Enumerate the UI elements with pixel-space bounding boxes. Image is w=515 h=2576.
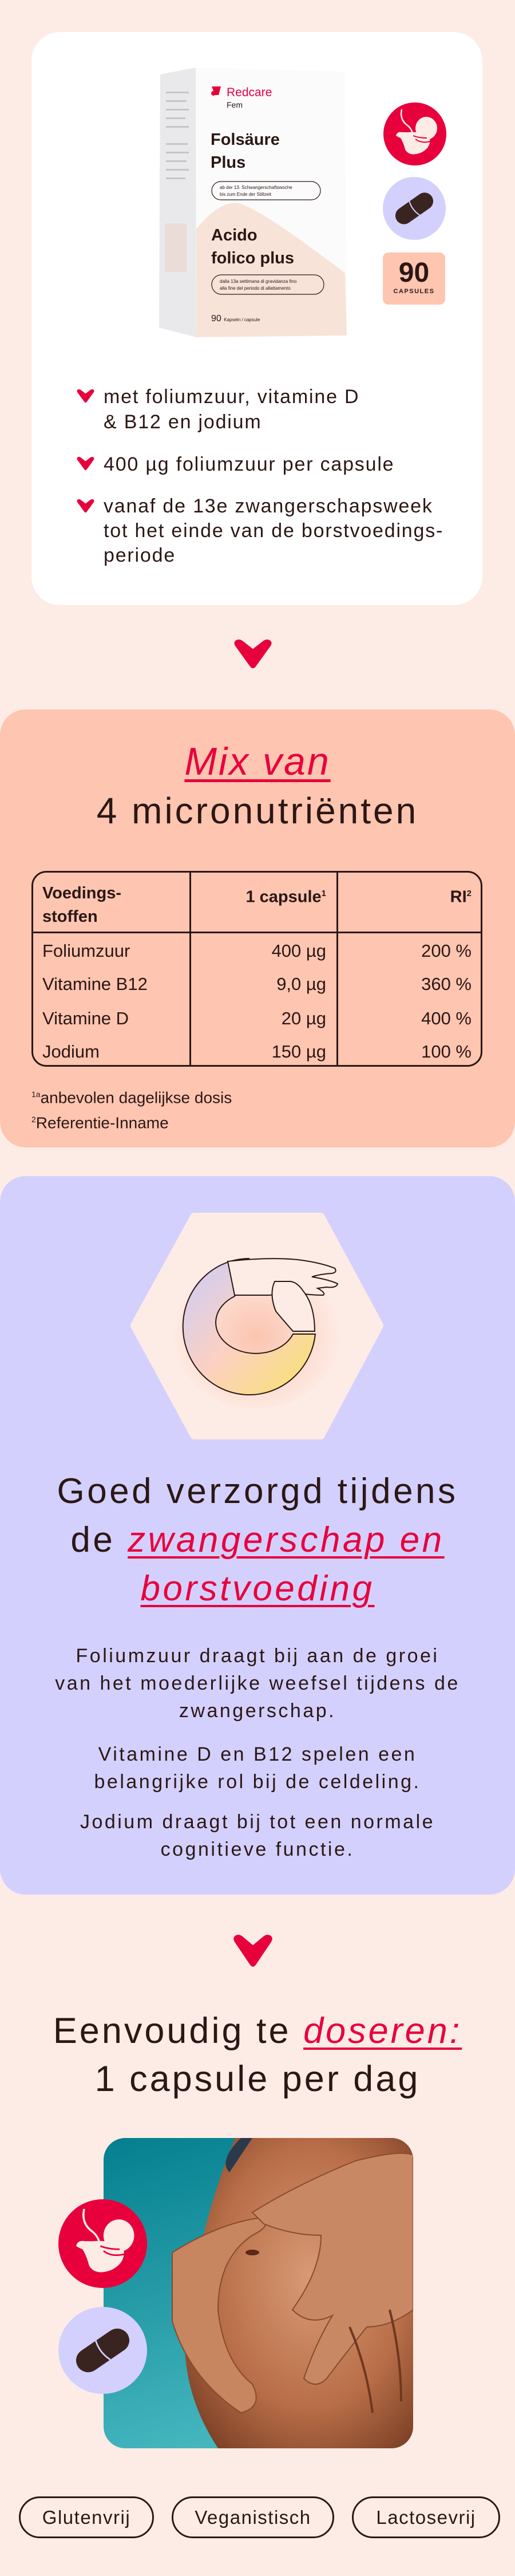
table: RI2 xyxy=(450,888,472,906)
table xyxy=(31,871,482,1067)
pill: veganistisch: Veganistisch xyxy=(195,2507,311,2527)
text: vitamins xyxy=(94,1743,421,1793)
panel: pregnancy care xyxy=(0,1176,515,1895)
heading: dosage: 1 capsule per dag xyxy=(95,2059,420,2099)
bullet 3: vanaf de 13e zwangerschapsweek xyxy=(104,495,433,517)
heading: pregnancy and breastfeeding: borstvoeding xyxy=(140,1569,375,1608)
text: iodine xyxy=(80,1811,435,1860)
text: folic acid: zwangerschap. xyxy=(179,1700,336,1722)
table: 400 µg xyxy=(272,941,326,961)
product box: Folsäure xyxy=(211,131,280,149)
icon: capsule (photo) xyxy=(58,2307,147,2394)
heading: dosage xyxy=(53,2011,462,2099)
text: benefits xyxy=(55,1645,460,1860)
text: iodine: Jodium draagt bij tot een normale xyxy=(80,1811,435,1833)
heading: dosage: Eenvoudig te doseren: xyxy=(53,2011,462,2051)
table: Jodium xyxy=(42,1042,100,1062)
heading: pregnancy and breastfeeding: Goed verzorgd tijdens xyxy=(57,1472,458,1511)
table: 360 % xyxy=(421,974,472,994)
product box: alla fine del periodo di allattamento xyxy=(220,286,291,291)
product box: Acido xyxy=(211,226,258,244)
text: folic acid: Foliumzuur draagt bij aan de groei xyxy=(76,1645,439,1667)
product box: 90 Kapseln / capsule xyxy=(211,314,260,324)
product box: Fem xyxy=(227,100,243,109)
bullet 1: & B12 en jodium xyxy=(104,411,262,433)
bullet 3 xyxy=(77,495,443,566)
pill: glutenvrij xyxy=(19,2496,154,2538)
text: folic acid: van het moederlijke weefsel tijdens de xyxy=(55,1672,460,1694)
heading: mix van: Mix van xyxy=(184,740,331,783)
product box xyxy=(159,68,347,337)
table rows xyxy=(42,941,472,1062)
heading: pregnancy and breastfeeding: de zwangerschap en xyxy=(70,1520,445,1560)
pill: lactosevrij xyxy=(352,2496,500,2538)
bullet 3: tot het einde van de borstvoedings- xyxy=(104,520,443,542)
panel: micronutrients xyxy=(0,709,515,1147)
badge: 90 capsules: 90 xyxy=(399,258,429,288)
product box: Plus xyxy=(211,153,245,172)
bullet 3: periode xyxy=(104,545,176,566)
footnotes xyxy=(31,1088,232,1132)
product box: folico plus xyxy=(211,249,294,267)
table: 20 µg xyxy=(282,1008,326,1028)
bullet 2: 400 µg foliumzuur per capsule xyxy=(104,453,394,475)
text: vitamins: belangrijke rol bij de celdeling. xyxy=(94,1771,421,1793)
table: 200 % xyxy=(421,941,472,961)
table: Voedings- xyxy=(42,884,121,902)
bullet 1: met foliumzuur, vitamine D xyxy=(104,386,359,408)
table: 100 % xyxy=(421,1042,472,1062)
table: 1 capsule1 xyxy=(245,888,326,906)
arrow: heart 1 xyxy=(234,639,272,669)
table: 9,0 µg xyxy=(276,974,326,994)
pill: lactosevrij: Lactosevrij xyxy=(376,2507,476,2527)
table: Vitamine D xyxy=(42,1008,129,1028)
badge: 90 capsules: CAPSULES xyxy=(394,288,434,295)
table: stoffen xyxy=(42,908,98,926)
text: vitamins: Vitamine D en B12 spelen een xyxy=(98,1743,417,1765)
heading: pregnancy and breastfeeding xyxy=(57,1472,458,1608)
table: Vitamine B12 xyxy=(42,974,148,994)
text: folic acid xyxy=(55,1645,460,1722)
badge: 90 capsules xyxy=(383,253,445,305)
icon: fetus xyxy=(383,102,446,165)
bullet list xyxy=(77,386,443,566)
heading: 4 micronutrienten: 4 micronutriënten xyxy=(97,790,418,831)
table: 150 µg xyxy=(272,1042,326,1062)
product box: Redcare xyxy=(227,86,272,99)
footnotes: 2Referentie-Inname xyxy=(31,1114,169,1132)
icon: fetus (photo) xyxy=(58,2199,147,2288)
panel: product card xyxy=(31,32,482,605)
table: Foliumzuur xyxy=(42,941,130,961)
product box: ab der 13. Schwangerschaftswoche xyxy=(220,185,292,190)
product box: dalla 13a settimana di gravidanza fino xyxy=(220,279,297,284)
pill: glutenvrij: Glutenvrij xyxy=(42,2507,130,2527)
icon: hands hexagon xyxy=(130,1213,383,1439)
footnotes: 1aanbevolen dagelijkse dosis xyxy=(31,1088,232,1106)
pill: veganistisch xyxy=(172,2496,334,2538)
text: iodine: cognitieve functie. xyxy=(161,1839,354,1860)
bullet 1 xyxy=(77,386,359,433)
icon: capsule xyxy=(383,177,446,240)
product box: bis zum Ende der Stillzeit xyxy=(220,192,272,197)
photo: pregnant belly with hands xyxy=(104,2138,413,2448)
table header xyxy=(42,884,472,926)
arrow: heart 2 xyxy=(233,1935,272,1967)
table: 400 % xyxy=(421,1008,472,1028)
